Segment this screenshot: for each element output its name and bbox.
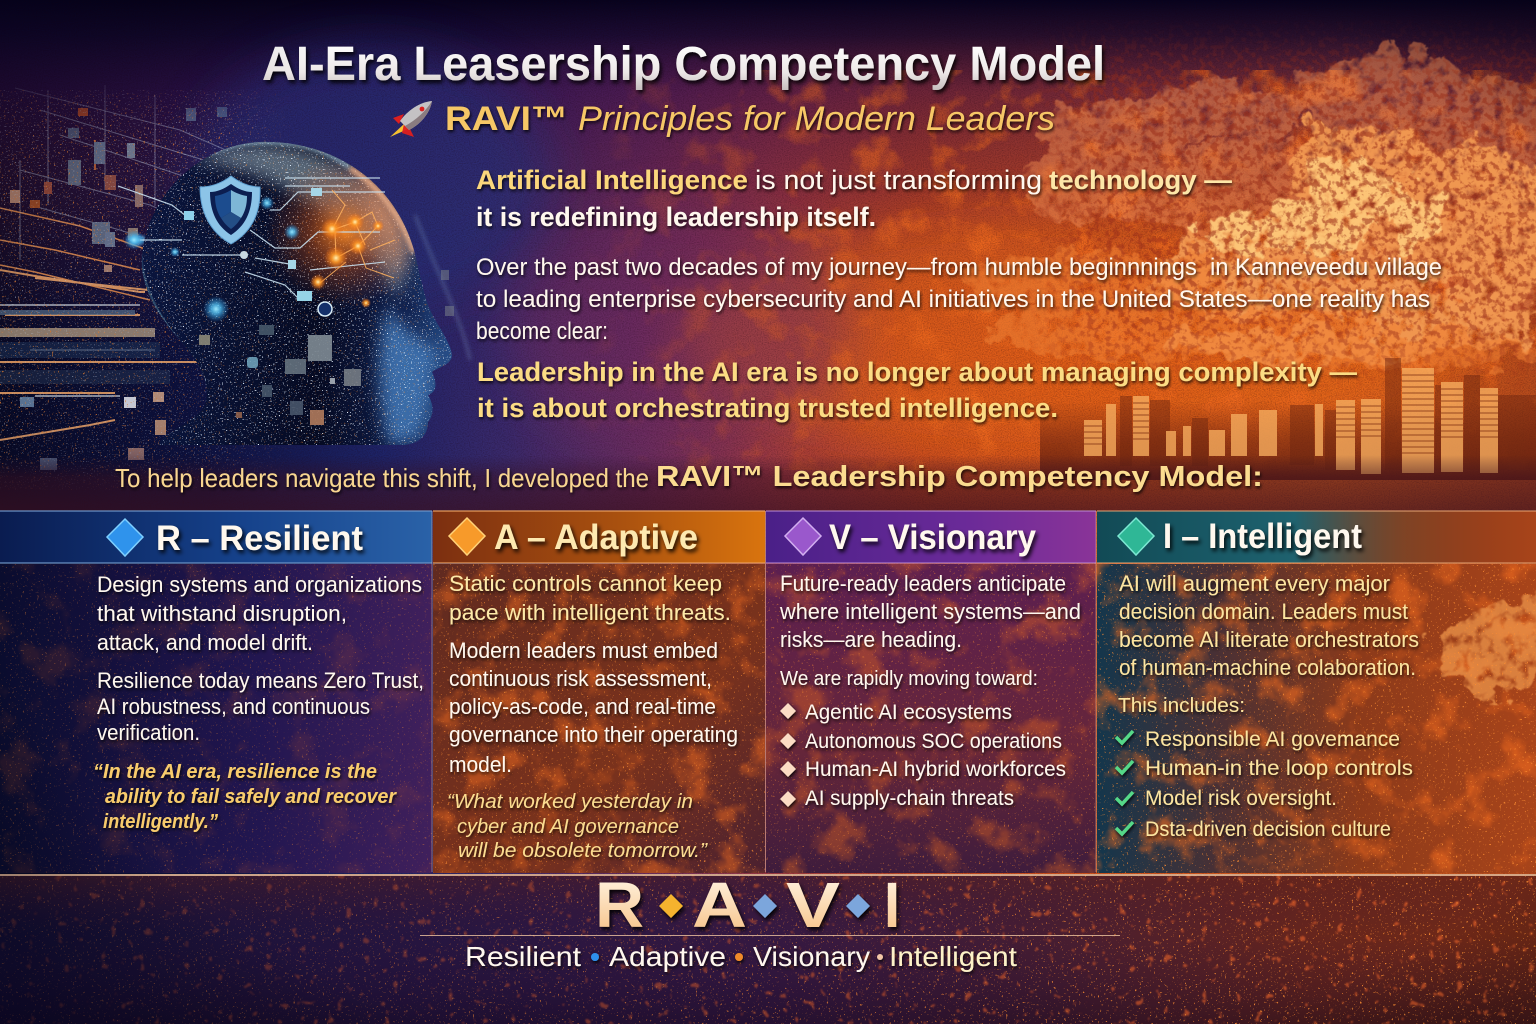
- intro statement: technology —: [1049, 165, 1232, 195]
- panel: visionary: [766, 511, 1096, 873]
- lead-in line: RAVI™ Leadership Competency Model:: [656, 461, 1263, 493]
- adaptive body text: pace with intelligent threats.: [449, 600, 731, 625]
- resilient quote: intelligently.”: [103, 811, 218, 833]
- heading: I Intelligent: I – Intelligent: [1163, 517, 1362, 556]
- panel: adaptive: [433, 511, 765, 873]
- adaptive body text: continuous risk assessment,: [449, 666, 712, 691]
- visionary bullet list: AI supply-chain threats: [805, 787, 1014, 810]
- visionary bullet list: [780, 701, 1066, 810]
- journey paragraph: become clear:: [476, 318, 608, 345]
- icon: purple diamond: [785, 518, 821, 555]
- adaptive body text: [449, 571, 738, 777]
- human head with digital brain: [118, 130, 470, 460]
- visionary body text: [779, 571, 1081, 690]
- panel: resilient: [0, 511, 432, 873]
- lead-in line: To help leaders navigate this shift, I developed the: [115, 463, 649, 493]
- resilient quote: [93, 761, 397, 833]
- acronym R A V I: V: [786, 869, 840, 941]
- journey paragraph: Over the past two decades of my journey—from humble beginnnings in Kanneveedu village: [476, 254, 1442, 281]
- visionary body text: risks—are heading.: [780, 627, 962, 652]
- acronym R A V I: [595, 869, 900, 941]
- intelligent body text: become AI literate orchestrators: [1119, 627, 1419, 652]
- visionary body text: where intelligent systems—and: [779, 599, 1081, 624]
- adaptive quote: will be obsolete tomorrow.”: [458, 840, 708, 862]
- panel: intelligent: [1097, 511, 1536, 873]
- icon: blue diamond: [107, 519, 143, 556]
- neural orange network: [320, 190, 395, 283]
- band behind lead-in: [0, 455, 1536, 511]
- footer backdrop: [0, 874, 1536, 1024]
- footer labels: Visionary: [753, 941, 870, 972]
- intro statement: Artificial Intelligence: [476, 165, 748, 195]
- visionary bullet list: Autonomous SOC operations: [805, 730, 1062, 753]
- adaptive body text: governance into their operating: [449, 722, 738, 747]
- resilient quote: “In the AI era, resilience is the: [93, 761, 377, 783]
- intro statement: [476, 165, 1232, 232]
- intelligent checklist: [1116, 728, 1413, 841]
- resilient body text: verification.: [97, 720, 200, 745]
- footer labels: [465, 941, 1017, 972]
- resilient body text: AI robustness, and continuous: [97, 694, 370, 719]
- acronym R A V I: I: [884, 869, 900, 941]
- icon: teal diamond: [1118, 518, 1154, 555]
- glowing nodes: [124, 188, 384, 322]
- key statement: Leadership in the AI era is no longer about managing complexity —: [477, 357, 1357, 387]
- skyline: [1040, 358, 1536, 480]
- adaptive quote: cyber and AI governance: [457, 816, 679, 838]
- footer labels: Intelligent: [889, 941, 1017, 972]
- resilient body text: that withstand disruption,: [97, 601, 347, 626]
- heading: V Visionary: V – Visionary: [829, 518, 1036, 557]
- intro statement: is not just transforming: [755, 165, 1042, 195]
- neck translucent strip: [142, 254, 207, 445]
- resilient body text: Design systems and organizations: [97, 572, 422, 597]
- acronym R A V I: R: [595, 869, 644, 941]
- speckled skull top: [190, 145, 414, 300]
- subtitle: RAVI™: [445, 100, 568, 138]
- visionary body text: We are rapidly moving toward:: [780, 668, 1038, 690]
- intelligent checklist: Model risk oversight.: [1145, 787, 1337, 810]
- clouds: [959, 33, 1536, 380]
- resilient body text: [97, 572, 424, 745]
- key statement: [477, 357, 1357, 423]
- visionary bullet list: Agentic AI ecosystems: [805, 701, 1012, 724]
- resilient body text: Resilience today means Zero Trust,: [97, 668, 424, 693]
- key statement: it is about orchestrating trusted intelligence.: [477, 393, 1058, 423]
- intelligent body text: [1118, 571, 1419, 717]
- intelligent checklist: Human-in the loop controls: [1145, 757, 1413, 780]
- heading: R Resilient: R – Resilient: [156, 519, 363, 558]
- lead-in line: [115, 461, 1263, 493]
- intelligent body text: AI will augment every major: [1119, 571, 1390, 596]
- intelligent body text: This includes:: [1118, 695, 1245, 717]
- adaptive body text: model.: [449, 752, 512, 777]
- icon: orange diamond: [449, 518, 485, 555]
- journey paragraph: [476, 254, 1442, 345]
- intelligent body text: decision domain. Leaders must: [1119, 599, 1408, 624]
- title: AI-Era Leasership Competency Model: [262, 38, 1105, 91]
- adaptive quote: [447, 791, 708, 862]
- footer labels: Adaptive: [609, 941, 726, 972]
- intelligent checklist: Dsta-driven decision culture: [1145, 818, 1391, 841]
- adaptive body text: Modern leaders must embed: [449, 638, 718, 663]
- adaptive body text: policy-as-code, and real-time: [449, 694, 716, 719]
- footer labels: Resilient: [465, 941, 581, 972]
- intro statement: it is redefining leadership itself.: [476, 202, 876, 232]
- subtitle: Principles for Modern Leaders: [578, 100, 1055, 138]
- intelligent checklist: Responsible AI govemance: [1145, 728, 1400, 751]
- floating data squares: [199, 270, 454, 425]
- adaptive body text: Static controls cannot keep: [449, 571, 722, 596]
- intelligent body text: of human-machine colaboration.: [1119, 655, 1416, 680]
- adaptive quote: “What worked yesterday in: [447, 791, 693, 813]
- acronym R A V I: A: [692, 869, 747, 941]
- icon: rocket: [390, 101, 432, 137]
- face shading: [379, 305, 440, 445]
- circuit lines: [118, 178, 385, 298]
- data stream field: [0, 85, 320, 490]
- resilient body text: attack, and model drift.: [97, 630, 313, 655]
- heading: A Adaptive: A – Adaptive: [494, 518, 698, 557]
- journey paragraph: to leading enterprise cybersecurity and AI initiatives in the United States—one reality has: [476, 286, 1430, 313]
- visionary body text: Future-ready leaders anticipate: [780, 571, 1066, 596]
- visionary bullet list: Human-AI hybrid workforces: [805, 758, 1066, 781]
- resilient quote: ability to fail safely and recover: [105, 786, 397, 808]
- icon: shield: [200, 176, 260, 244]
